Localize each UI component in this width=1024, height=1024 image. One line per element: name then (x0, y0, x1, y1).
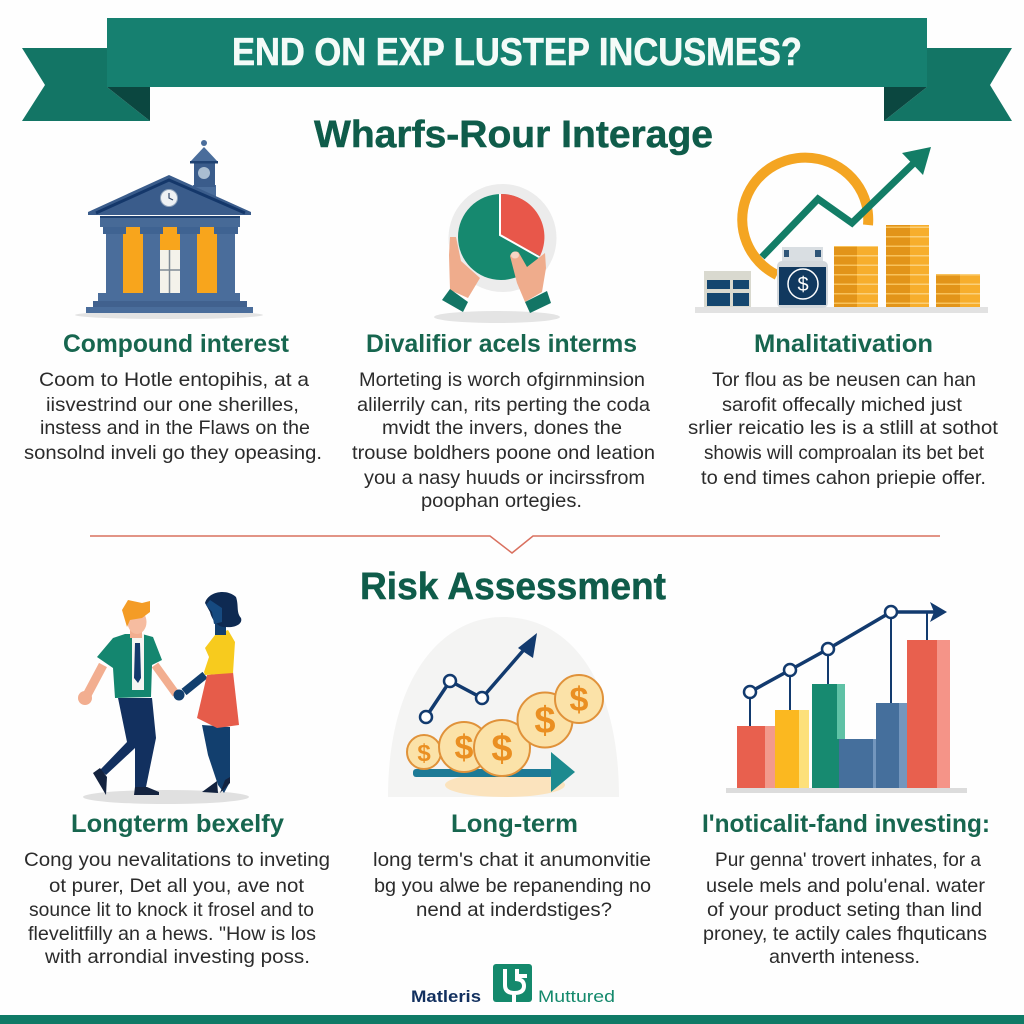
footer logo: Matleris (411, 988, 481, 1006)
icon: coins with trend line (388, 617, 619, 797)
text block: third concept: Tor flou as be neusen can han (712, 369, 976, 391)
text block: diversification: mvidt the invers, dones the (382, 417, 622, 439)
banner title: END ON EXP LUSTEP INCUSMES? (232, 31, 802, 74)
text block: longterm benefit: ot purer, Det all you, ave not (49, 875, 305, 897)
heading: third risk concept: I'noticalit-fand investing: (702, 810, 990, 838)
text block: third risk concept: anverth inteness. (769, 946, 920, 968)
footer logo: Muttured (538, 987, 615, 1006)
text block: third risk concept: proney, te actily cales fhquticans (703, 923, 987, 945)
icon: couple holding hands (78, 592, 249, 804)
text block: third risk concept: Pur genna' trovert inhates, for a (715, 849, 981, 871)
icon: coins with trend line: $ (417, 740, 431, 767)
text block: third concept: to end times cahon priepie offer. (701, 467, 986, 489)
icon: growth arrow with coins (695, 147, 988, 313)
text block: longterm benefit (24, 849, 330, 968)
text block: compound interest: iisvestrind our one sherilles, (46, 394, 299, 416)
text block: long-term (373, 849, 651, 921)
heading: compound interest: Compound interest (63, 330, 290, 358)
icon: coins with trend line: $ (455, 729, 474, 767)
text block: compound interest: Coom to Hotle entopihis, at a (39, 369, 309, 391)
heading: third concept: Mnalitativation (754, 330, 933, 358)
text block: third concept: srlier reicatio les is a stlill at sothot (688, 417, 999, 439)
text block: third concept (688, 369, 999, 489)
text block: compound interest: sonsolnd inveli go they opeasing. (24, 442, 322, 464)
text block: long-term: long term's chat it anumonvitie (373, 849, 651, 871)
text block: long-term: bg you alwe be repanending no (374, 875, 651, 897)
text block: third concept: sarofit offecally miched just (722, 394, 963, 416)
text block: third risk concept (703, 849, 987, 968)
footer bar (0, 1015, 1024, 1024)
icon: bank building (75, 140, 263, 319)
icon: coins with trend line: $ (534, 700, 556, 742)
text block: diversification (352, 369, 655, 512)
man (78, 600, 176, 795)
section heading: risk assessment: Risk Assessment (360, 566, 666, 608)
text block: longterm benefit: with arrondial investing poss. (44, 946, 310, 968)
icon: growth arrow with coins: $ (797, 274, 809, 296)
text block: longterm benefit: sounce lit to knock it frosel and to (29, 899, 314, 921)
text block: compound interest (24, 369, 322, 464)
text block: third risk concept: usele mels and polu'enal. water (706, 875, 986, 897)
icon: pie chart in hands (434, 184, 560, 323)
woman (174, 592, 241, 793)
heading: longterm benefit: Longterm bexelfy (71, 810, 284, 838)
section heading: top: Wharfs-Rour Interage (314, 114, 713, 156)
text block: longterm benefit: flevelitfilly an a hews. "How is los (28, 923, 316, 945)
text block: long-term: nend at inderdstiges? (416, 899, 612, 921)
text block: compound interest: instess and in the Flaws on the (40, 417, 310, 439)
text block: diversification: poophan ortegies. (421, 490, 582, 512)
title banner (22, 18, 1012, 121)
text block: diversification: Morteting is worch ofgirnminsion (359, 369, 645, 391)
icon: coins with trend line: $ (570, 681, 589, 719)
footer logo (411, 964, 615, 1006)
text block: diversification: you a nasy huuds or incirssfrom (364, 467, 645, 489)
heading: diversification: Divalifior acels interms (366, 330, 637, 358)
text block: diversification: alilerrily can, rits perting the coda (357, 394, 650, 416)
text block: third risk concept: of your product seting than lind (707, 899, 982, 921)
text block: longterm benefit: Cong you nevalitations to inveting (24, 849, 330, 871)
icon: coins with trend line: $ (491, 728, 513, 770)
text block: third concept: showis will comproalan its bet bet (704, 442, 985, 464)
chart: bars with trend line (726, 602, 967, 793)
text block: diversification: trouse boldhers poone ond leation (352, 442, 655, 464)
heading: long-term: Long-term (451, 810, 578, 838)
